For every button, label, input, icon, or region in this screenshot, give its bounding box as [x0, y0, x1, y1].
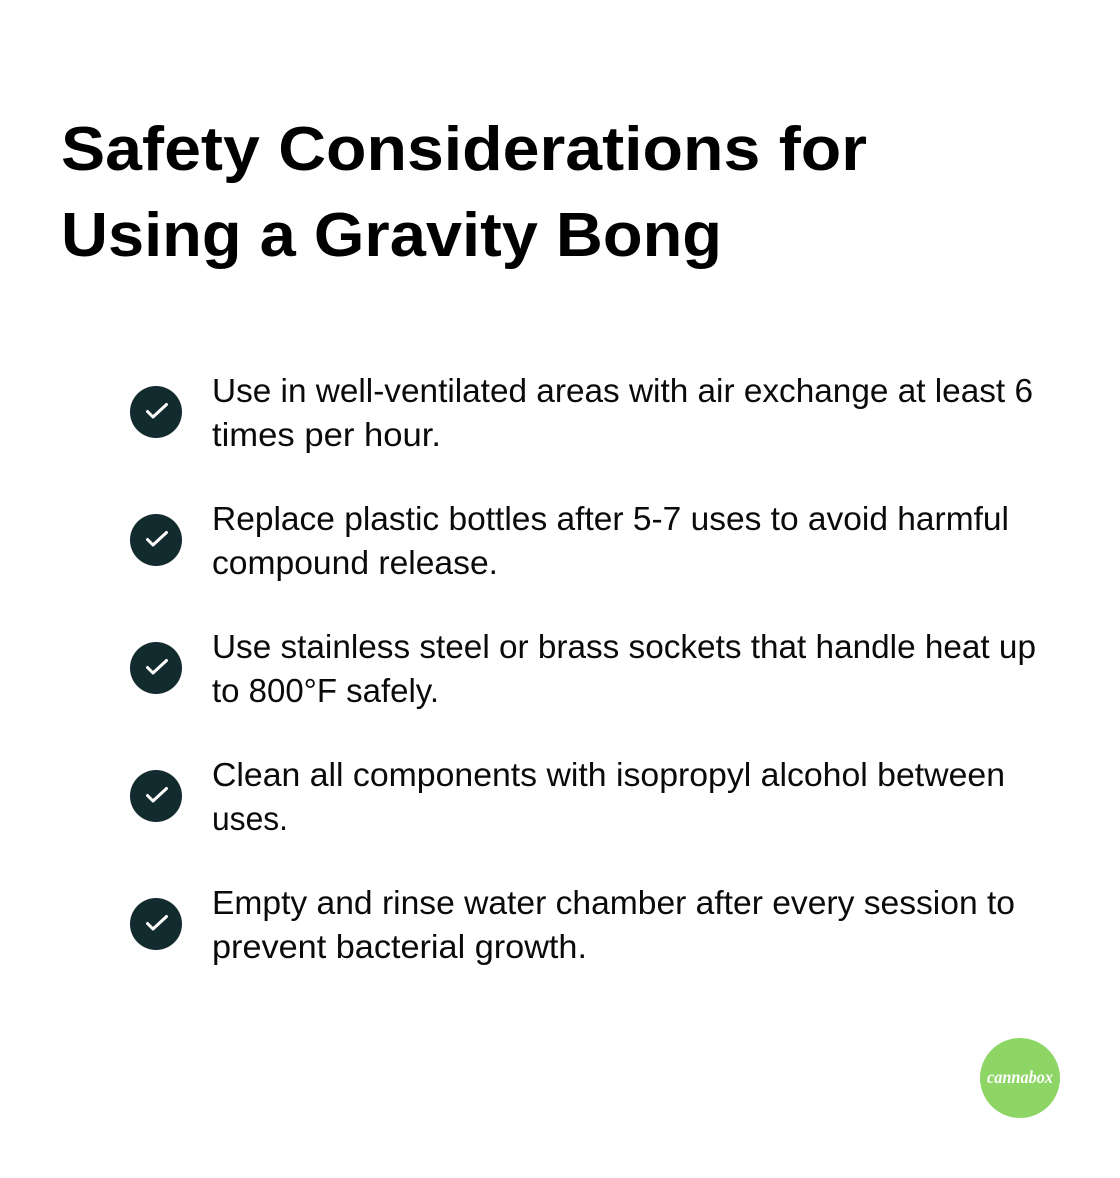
- item 2: plastic bottles: Replace plastic bottles after 5-7 uses to avoid harmful: [212, 500, 1009, 537]
- item 5: water chamber: Empty and rinse water chamber after every session to: [212, 884, 1015, 921]
- title: Using a Gravity Bong: [61, 201, 722, 270]
- item 5: water chamber: prevent bacterial growth.: [212, 928, 587, 965]
- logo: cannabox badge: cannabox: [987, 1067, 1053, 1087]
- item 3: sockets: to 800°F safely.: [212, 672, 439, 709]
- item 4: cleaning: [130, 756, 1005, 837]
- item 1: ventilation: times per hour.: [212, 416, 441, 453]
- item 3: sockets: [130, 628, 1036, 709]
- item 4: cleaning: uses.: [212, 800, 288, 837]
- item 4: cleaning: Clean all components with isopropyl alcohol between: [212, 756, 1005, 793]
- item 1: ventilation: [130, 372, 1033, 453]
- item 5: water chamber: [130, 884, 1015, 965]
- item 2: plastic bottles: compound release.: [212, 544, 498, 581]
- checklist: [130, 372, 1036, 965]
- item 3: sockets: Use stainless steel or brass sockets that handle heat up: [212, 628, 1036, 665]
- logo: cannabox badge: [980, 1038, 1060, 1118]
- title: Safety Considerations for: [61, 115, 867, 184]
- item 2: plastic bottles: [130, 500, 1009, 581]
- title: [61, 115, 867, 270]
- item 1: ventilation: Use in well-ventilated areas with air exchange at least 6: [212, 372, 1033, 409]
